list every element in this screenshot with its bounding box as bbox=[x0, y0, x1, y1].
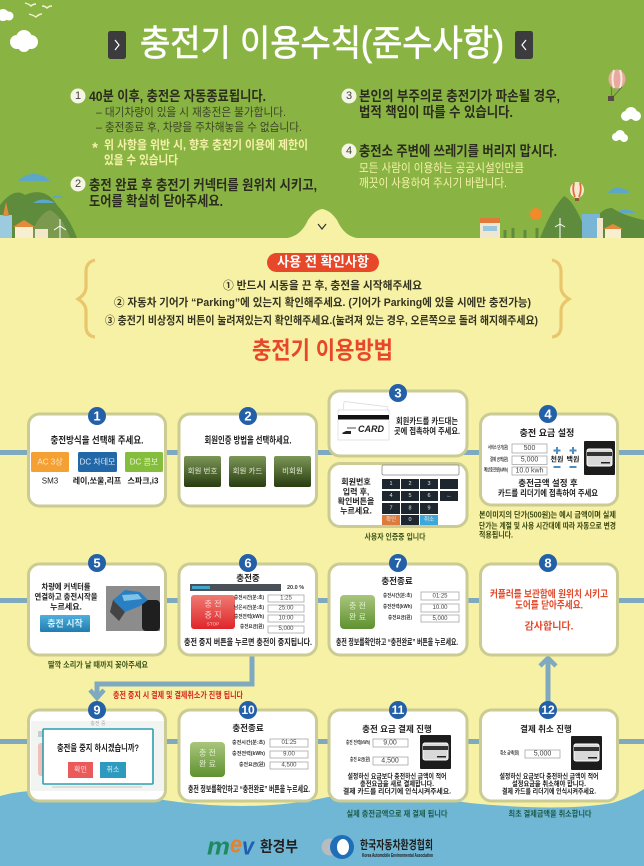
caption: step 11: 실제 충전금액으로 재 결제 됩니다 bbox=[346, 808, 448, 818]
readings: 5,000 bbox=[534, 750, 551, 758]
button done: 완 료 bbox=[199, 760, 216, 768]
readings: 충전 전력(kWh) bbox=[346, 739, 370, 746]
connector lines bbox=[0, 450, 644, 744]
readings: 5,000 bbox=[278, 626, 294, 632]
form bbox=[484, 444, 547, 475]
badge 6: 6 bbox=[244, 556, 252, 570]
panel: step 5: 연결하고 충전시작을 bbox=[34, 592, 98, 602]
panel: step 1: SM3 bbox=[42, 476, 59, 486]
badge 12: 12 bbox=[541, 703, 555, 717]
panel: step 8: 감사합니다. bbox=[525, 620, 574, 632]
panel: step 7: 충전종료 bbox=[381, 576, 413, 586]
logo: mev, Ministry of Environment: e bbox=[230, 832, 242, 858]
rule 1: – 대기차량이 있을 시 재충전은 불가합니다. bbox=[96, 106, 286, 119]
panel: step 4: 카드를 리더기에 접촉하여 주세요 bbox=[498, 488, 598, 498]
decoration: left hills and town bbox=[0, 174, 77, 238]
readings bbox=[234, 594, 304, 633]
panel: step 3 card bbox=[329, 384, 467, 456]
logo: Korea Automobile Environmental Association: 한국자동차환경협회 bbox=[360, 837, 433, 852]
keypad bbox=[382, 479, 458, 525]
panel: step 7: 충전 정보를확인하고 “충전완료” 버튼을 누르세요. bbox=[336, 637, 458, 647]
badge 3: 3 bbox=[394, 386, 402, 400]
adjust buttons bbox=[551, 447, 579, 467]
panel: step 11: 설정하신 요금보다 충전하신 금액이 적어 bbox=[348, 772, 446, 780]
dialog bbox=[43, 729, 153, 784]
rule 3 bbox=[342, 88, 560, 120]
check line 1: ① 반드시 시동을 끈 후, 충전을 시작해주세요 bbox=[223, 278, 422, 292]
panel: step 1: 충전방식을 선택해 주세요. bbox=[50, 434, 144, 446]
readings: 9,00 bbox=[383, 740, 397, 746]
note: stop charging: 충전 중지 시 결제 및 결제취소가 진행 됩니다 bbox=[113, 690, 243, 700]
keypad: 0 bbox=[408, 517, 412, 523]
rule 1: – 충전종료 후, 차량을 주차해놓을 수 없습니다. bbox=[96, 121, 302, 134]
panel: step 11: 충전 요금 결제 진행 bbox=[362, 724, 432, 734]
button done bbox=[340, 595, 375, 629]
readings bbox=[383, 592, 459, 622]
panel: step 8: 도어를 닫아주세요. bbox=[515, 598, 583, 612]
readings bbox=[232, 739, 308, 769]
readings: 10.00 bbox=[432, 605, 448, 611]
text: instructions: 입력 후, bbox=[343, 486, 369, 496]
rule 1: 40분 이후, 충전은 자동종료됩니다. bbox=[89, 88, 266, 104]
panel: step 11 bbox=[329, 701, 467, 801]
keypad: 1 bbox=[389, 481, 393, 487]
panel: step 12: 설정하신 요금보다 충전하신 금액이 적어 bbox=[500, 772, 598, 780]
logo: mev, Ministry of Environment: m bbox=[207, 834, 230, 860]
keypad: 4 bbox=[389, 493, 393, 499]
panel: step 12: 결제 취소 진행 bbox=[520, 724, 572, 734]
readings: 남은시간(분:초) bbox=[234, 604, 264, 611]
panel: step 1: 레이,쏘울,리프 bbox=[73, 476, 122, 486]
button stop bbox=[191, 595, 235, 629]
logo: mev, Ministry of Environment bbox=[207, 832, 298, 860]
readings: 4,500 bbox=[281, 762, 297, 768]
keypad: 확인 bbox=[386, 515, 396, 523]
image: connector bbox=[106, 586, 160, 631]
decoration: white clouds bbox=[0, 9, 641, 142]
panel: step 5: 차량에 커넥터를 bbox=[42, 582, 91, 592]
caption: step 5: 딸깍 소리가 날 때까지 꽂아주세요 bbox=[48, 660, 149, 670]
faded screen behind dialog: 충전 중 bbox=[90, 720, 106, 727]
readings: 충전요금(원) bbox=[239, 761, 265, 768]
button stop: STOP bbox=[207, 622, 219, 626]
readings: 충전전력(kWh) bbox=[383, 603, 412, 610]
form: 500 bbox=[524, 445, 535, 452]
button DC combo: DC 콤보 bbox=[130, 458, 158, 466]
panel: step 9 bbox=[28, 701, 166, 801]
readings: 9.00 bbox=[283, 752, 295, 758]
adjust buttons: 천원 bbox=[551, 454, 563, 464]
icon: card reader bbox=[571, 736, 602, 770]
button done bbox=[190, 742, 225, 777]
rule 2: 도어를 확실히 닫아주세요. bbox=[89, 193, 223, 209]
badge 9: 9 bbox=[93, 702, 101, 718]
panel: step 5: 누르세요. bbox=[50, 602, 82, 612]
panel: step 12 bbox=[480, 701, 618, 801]
panel: step 4: 충전금액 설정 후 bbox=[518, 478, 578, 488]
readings: 충전시간(분:초) bbox=[232, 739, 265, 746]
panel: step 4 bbox=[480, 405, 618, 505]
check line 3: ③ 충전기 비상정지 버튼이 눌려져있는지 확인해주세요.(눌려져 있는 경우, 오른쪽으로 돌려 해지해주세요) bbox=[105, 313, 538, 327]
panel: step 12: 설정요금을 취소해야 합니다. bbox=[512, 779, 586, 788]
rule 2: 충전 완료 후 충전기 커넥터를 원위치 시키고, bbox=[89, 177, 317, 193]
panel: step 1 bbox=[28, 407, 166, 506]
badge bbox=[267, 253, 379, 272]
readings: 25:00 bbox=[278, 606, 294, 612]
icon: card reader bbox=[420, 735, 451, 769]
readings: 5,000 bbox=[432, 616, 448, 622]
logo: Korea Automobile Environmental Association: Korea Automobile Environmental Association bbox=[362, 853, 433, 859]
form: 5,000 bbox=[521, 456, 538, 464]
panel: step 3 card: 곳에 접촉하여 주세요. bbox=[394, 426, 460, 436]
form: 결제 금액(원) bbox=[490, 456, 508, 463]
caption: step 12: 최초 결제금액을 취소합니다 bbox=[508, 808, 592, 818]
readings: 10:00 bbox=[278, 616, 294, 622]
note: step 4: 적용됩니다. bbox=[479, 530, 513, 540]
text: instructions: 확인버튼을 bbox=[338, 496, 375, 506]
button done: 충 전 bbox=[199, 748, 216, 758]
badge 7: 7 bbox=[394, 556, 402, 570]
badge 10: 10 bbox=[241, 703, 255, 717]
heading: how to use: 충전기 이용방법 bbox=[252, 338, 393, 364]
rule 1: 있을 수 있습니다 bbox=[104, 152, 178, 167]
icon: balloon top right bbox=[608, 70, 626, 101]
tag: left arrow bbox=[108, 31, 126, 59]
input display bbox=[382, 465, 459, 475]
readings: 취소 금액(원) bbox=[500, 750, 519, 756]
keypad: 5 bbox=[408, 493, 412, 499]
button non-member: 비회원 bbox=[282, 466, 303, 476]
icon: balloon lower right bbox=[570, 182, 584, 201]
keypad: 7 bbox=[389, 506, 393, 512]
keypad: 8 bbox=[408, 506, 412, 512]
bottom wave bbox=[0, 789, 644, 866]
button confirm: 확인 bbox=[74, 764, 87, 774]
title text: 충전기 이용수칙(준수사항) bbox=[140, 22, 504, 64]
text: instructions bbox=[338, 476, 375, 516]
progress bar: 20.0 % bbox=[287, 585, 304, 591]
hump with chevron bbox=[287, 209, 357, 238]
panel: step 7 bbox=[329, 554, 467, 655]
tag: right arrow bbox=[515, 31, 533, 59]
panel: pre-use checks bbox=[78, 253, 569, 337]
keypad: 취소 bbox=[424, 515, 434, 523]
button stop: 충 전 bbox=[205, 598, 221, 608]
note: step 4: 단가는 계절 및 사용 시간대에 따라 자동으로 변경 bbox=[479, 520, 616, 530]
panel: step 5 bbox=[28, 554, 166, 655]
button done: 충 전 bbox=[349, 600, 366, 610]
button AC: AC 3상 bbox=[37, 456, 63, 466]
rule 1 bbox=[70, 88, 308, 167]
panel: step 6 bbox=[179, 554, 316, 655]
form: 서비스 단가(원) bbox=[488, 444, 508, 451]
icon: card: CARD bbox=[358, 424, 384, 434]
rule 1: 위 사항을 위반 시, 향후 충전기 이용에 제한이 bbox=[104, 137, 308, 152]
panel: step 10 bbox=[179, 701, 316, 801]
panel: step 11: 충전요금을 새로 결제합니다. bbox=[360, 779, 434, 788]
title bbox=[108, 22, 533, 64]
keypad: ← bbox=[446, 493, 452, 499]
logo: Korea Automobile Environmental Association bbox=[322, 835, 433, 859]
form: 예상충전량(kWh) bbox=[484, 466, 508, 474]
panel: step 12: 결제 카드를 리더기에 인식시켜주세요. bbox=[502, 786, 596, 796]
button member number: 회원 번호 bbox=[188, 466, 217, 476]
rule 2 bbox=[70, 176, 317, 209]
keypad: 3 bbox=[427, 481, 431, 487]
badge 8: 8 bbox=[544, 556, 552, 570]
logo: mev, Ministry of Environment: 환경부 bbox=[260, 838, 298, 856]
rule 4: 깨끗이 사용하여 주시기 바랍니다. bbox=[359, 176, 507, 190]
readings: 1:25 bbox=[280, 596, 292, 602]
rule 3: 3 bbox=[346, 90, 352, 102]
readings: 충전전력(kWh) bbox=[232, 750, 265, 757]
badge: 사용 전 확인사항 bbox=[277, 254, 370, 270]
right brace bbox=[552, 260, 569, 337]
logo: mev, Ministry of Environment: v bbox=[242, 834, 255, 860]
readings: 충전요금(원) bbox=[240, 623, 264, 630]
keypad: 6 bbox=[427, 493, 431, 499]
button done: 완 료 bbox=[349, 612, 366, 622]
decoration: right hills and town bbox=[480, 188, 644, 238]
panel: step 6: 충전중 bbox=[236, 573, 260, 583]
form: 10.0 kwh bbox=[515, 468, 544, 474]
panel: step 3 keypad bbox=[329, 464, 467, 526]
readings: 01:25 bbox=[281, 740, 297, 746]
panel: step 4: 충전 요금 설정 bbox=[520, 427, 574, 438]
rule 3: 법적 책임이 따를 수 있습니다. bbox=[359, 104, 513, 120]
rule 4 bbox=[342, 143, 557, 190]
badge 1: 1 bbox=[93, 408, 101, 424]
keypad: 2 bbox=[408, 481, 412, 487]
rule 1: * bbox=[92, 140, 98, 156]
panel: step 3 card: 회원카드를 카드대는 bbox=[396, 416, 458, 426]
panel: step 6: 충전 중지 버튼을 누르면 충전이 중지됩니다. bbox=[184, 637, 312, 647]
rule 4: 4 bbox=[346, 145, 352, 157]
button start: 충전 시작 bbox=[47, 618, 84, 628]
rule 1: 1 bbox=[75, 90, 81, 102]
readings: 01:25 bbox=[432, 594, 448, 600]
readings: 충전시간(분:초) bbox=[383, 592, 412, 599]
icon: card reader bbox=[584, 441, 615, 475]
header: green band bbox=[0, 0, 644, 238]
panel: step 11: 결제 카드를 리더기에 인식시켜주세요. bbox=[343, 786, 451, 796]
note: step 4 bbox=[479, 510, 616, 540]
arrow: step 12 to 8 bbox=[540, 658, 556, 709]
panel: step 1: 스파크,i3 bbox=[128, 476, 159, 486]
button cancel: 취소 bbox=[107, 766, 120, 774]
rule 4: 충전소 주변에 쓰레기를 버리지 맙시다. bbox=[359, 143, 557, 159]
text: instructions: 회원번호 bbox=[341, 476, 371, 486]
left brace bbox=[78, 260, 95, 337]
panel: step 10: 충전 정보를확인하고 “충전완료” 버튼을 누르세요. bbox=[188, 784, 310, 794]
readings: 충전요금(원) bbox=[388, 614, 412, 621]
readings: 4,500 bbox=[381, 758, 399, 764]
badge 2: 2 bbox=[244, 408, 252, 424]
readings bbox=[346, 739, 408, 765]
badge 5: 5 bbox=[93, 556, 101, 570]
badge 11: 11 bbox=[392, 703, 405, 717]
text: instructions: 누르세요. bbox=[340, 506, 372, 516]
arrow: step 6 to 9 bbox=[90, 655, 252, 698]
readings bbox=[500, 750, 560, 758]
panel: step 2: 회원인증 방법을 선택하세요. bbox=[204, 434, 292, 446]
rule 4: 모든 사람이 이용하는 공공시설인만큼 bbox=[359, 161, 524, 175]
button stop: 중 지 bbox=[205, 610, 221, 620]
panel: step 2 bbox=[179, 407, 316, 506]
panel: step 8 bbox=[480, 554, 618, 655]
caption: step 3: 사용자 인증중 입니다 bbox=[364, 532, 426, 542]
check line 2: ② 자동차 기어가 “Parking”에 있는지 확인해주세요. (기어가 Parking에 있을 시에만 충전가능) bbox=[114, 295, 531, 309]
rule 2: 2 bbox=[75, 178, 81, 190]
rule 3: 본인의 부주의로 충전기가 파손될 경우, bbox=[359, 88, 560, 104]
adjust buttons: 백원 bbox=[567, 454, 579, 464]
keypad: 9 bbox=[427, 506, 431, 512]
readings: 충전시간(분:초) bbox=[234, 594, 264, 601]
readings: 충전전력(kWh) bbox=[234, 613, 264, 620]
note: step 4: 본이미지의 단가(500원)는 예시 금액이며 실제 bbox=[479, 510, 616, 520]
decoration: birds bbox=[25, 3, 52, 17]
readings: 충전 요금(원) bbox=[350, 756, 370, 763]
dialog: 충전을 중지 하시겠습니까? bbox=[57, 742, 139, 753]
panel: step 8: 커플러를 보관함에 원위치 시키고 bbox=[490, 588, 608, 600]
button member card: 회원 카드 bbox=[233, 466, 262, 476]
button DC CHAdeMO: DC 차데모 bbox=[80, 458, 115, 466]
panel: step 10: 충전종료 bbox=[232, 723, 264, 733]
badge 4: 4 bbox=[544, 406, 552, 422]
